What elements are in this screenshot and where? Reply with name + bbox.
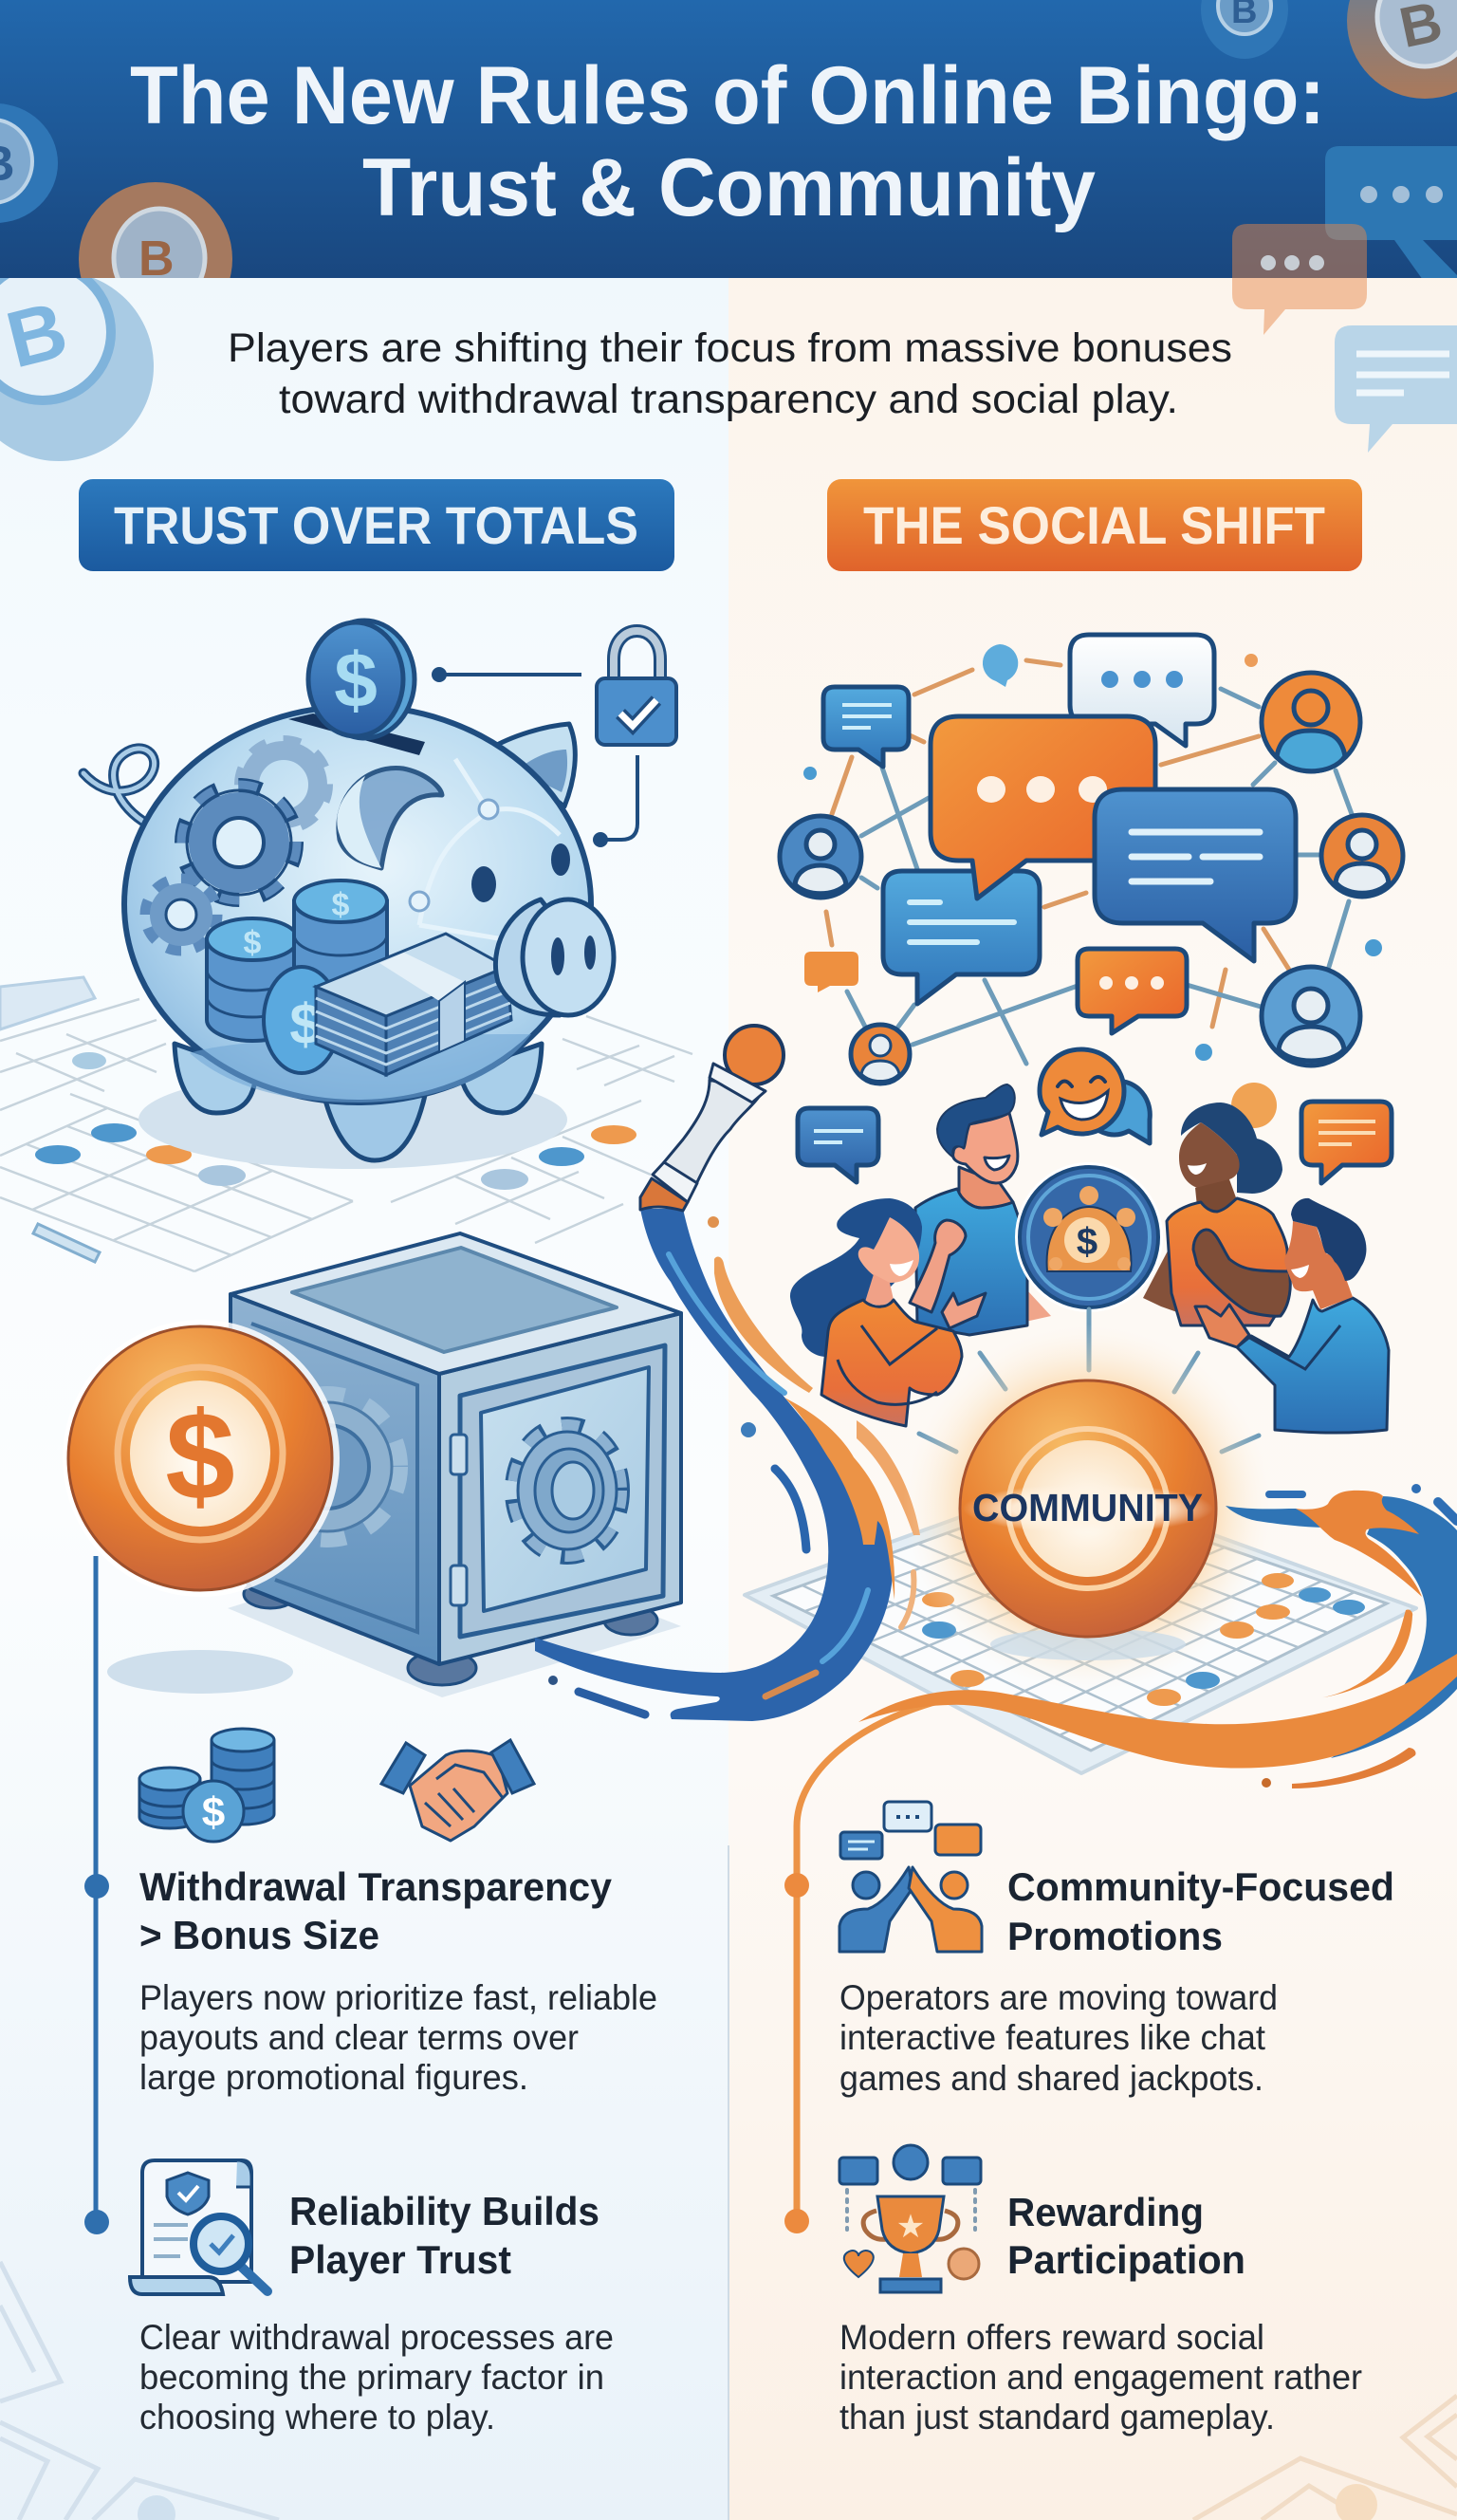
- piggy bank: [83, 621, 614, 1169]
- person: man in blue shirt: [915, 1084, 1051, 1335]
- coin stacks: [207, 880, 387, 1073]
- lock connector lines: [432, 667, 637, 847]
- banner: the social shift: [827, 479, 1362, 571]
- icon: trophy with social reactions: [839, 2145, 981, 2292]
- chat network connector lines: [803, 654, 1382, 1064]
- avatar: right: [1321, 815, 1403, 897]
- section: reliability builds player trust: [139, 2189, 614, 2437]
- decorative chat bubbles, upper right: [1232, 224, 1457, 453]
- cash bundle: [316, 934, 511, 1075]
- icon: document with shield and magnifier: [130, 2160, 267, 2294]
- eyes: [471, 866, 496, 902]
- coin shadow: [107, 1650, 293, 1694]
- person: woman with dark skin: [1143, 1102, 1290, 1325]
- jackpot medallion: $: [1077, 1221, 1097, 1263]
- tail: [83, 749, 155, 821]
- person: woman with orange top: [790, 1198, 986, 1426]
- orange dollar coin: [63, 1320, 340, 1597]
- icon: coin stacks: [139, 1729, 274, 1842]
- header band: B: [138, 232, 175, 287]
- chat bubble: small round: [983, 644, 1018, 687]
- orange and blue paint ribbons: [784, 1484, 1457, 2233]
- chat bubble: medium blue: [883, 871, 1040, 1004]
- ear: [339, 769, 442, 868]
- title: Trust & Community: [362, 142, 1096, 233]
- section: withdrawal transparency: Withdrawal Transparency: [139, 1864, 613, 1909]
- section: community-focused promotions: games and shared jackpots.: [839, 2059, 1263, 2098]
- chat bubble: people right: [1231, 1083, 1392, 1183]
- chat bubble: big blue: [1095, 789, 1296, 961]
- section: reliability builds player trust: Player Trust: [289, 2237, 511, 2282]
- paintbrush and blue paint stream: [535, 1026, 920, 1721]
- section: rewarding participation: interaction and engagement rather: [839, 2358, 1362, 2397]
- coin stacks: $: [289, 992, 322, 1056]
- chat bubble: small orange: [804, 952, 858, 992]
- chat bubble: people left: [798, 1108, 878, 1182]
- banner: trust over totals: TRUST OVER TOTALS: [114, 495, 638, 555]
- falling coin: [308, 621, 415, 738]
- section: withdrawal transparency: > Bonus Size: [139, 1913, 379, 1957]
- chat bubble: big orange: [931, 716, 1155, 899]
- right bingo card: [745, 1480, 1416, 1773]
- circuit line: [419, 759, 560, 949]
- coin stacks: $: [332, 887, 350, 923]
- section: rewarding participation: Rewarding: [1007, 2190, 1204, 2234]
- section: withdrawal transparency: payouts and clear terms over: [139, 2018, 579, 2057]
- coin slot: [288, 713, 425, 755]
- title: [130, 50, 1325, 233]
- section: community-focused promotions: [839, 1864, 1394, 2098]
- snout: [495, 899, 579, 1015]
- section: reliability builds player trust: Reliability Builds: [289, 2189, 599, 2233]
- gears: [249, 750, 318, 819]
- community ball: [903, 1324, 1273, 1694]
- laughing emoji bubble: [1040, 1049, 1150, 1143]
- padlock with check: [597, 631, 676, 745]
- section: withdrawal transparency: large promotional figures.: [139, 2058, 528, 2097]
- section: community-focused promotions: interactive features like chat: [839, 2018, 1266, 2057]
- section: community-focused promotions: Operators are moving toward: [839, 1978, 1278, 2017]
- section: rewarding participation: [839, 2190, 1362, 2437]
- avatar: left: [780, 816, 861, 898]
- safe: [228, 1233, 681, 1697]
- section: withdrawal transparency: Players now prioritize fast, reliable: [139, 1978, 657, 2017]
- coin stacks: $: [244, 925, 262, 961]
- icon: coin stacks: $: [202, 1789, 225, 1836]
- subtitle: Players are shifting their focus from massive bonuses: [228, 325, 1232, 371]
- section: rewarding participation: Modern offers reward social: [839, 2318, 1264, 2357]
- falling coin: $: [334, 638, 378, 724]
- section: reliability builds player trust: becoming the primary factor in: [139, 2358, 604, 2397]
- icon: trophy with social reactions: ★: [896, 2209, 925, 2245]
- banner: the social shift: THE SOCIAL SHIFT: [863, 495, 1325, 555]
- community rays: [919, 1309, 1259, 1452]
- subtitle: [228, 325, 1232, 422]
- left bingo card floor: [0, 977, 692, 1271]
- section: community-focused promotions: Promotions: [1007, 1914, 1223, 1958]
- chat bubble: small blue upper left: [823, 687, 909, 767]
- section: community-focused promotions: Community-Focused: [1007, 1864, 1394, 1909]
- icon: high five with chat bubbles: [839, 1802, 982, 1952]
- decorative bingo ball, lower left: [0, 264, 154, 461]
- timeline: trust: [84, 1556, 109, 2234]
- header band: [0, 0, 1457, 278]
- decorative bingo ball, lower left: B: [0, 285, 76, 385]
- person: man in blue sweater: [1195, 1198, 1389, 1433]
- avatar: top right: [1262, 673, 1360, 771]
- subtitle: toward withdrawal transparency and social play.: [279, 377, 1178, 422]
- section: rewarding participation: Participation: [1007, 2237, 1245, 2282]
- section: reliability builds player trust: choosing where to play.: [139, 2398, 495, 2437]
- chat bubble: top white: [1070, 635, 1214, 746]
- banner: trust over totals: [79, 479, 674, 571]
- chat bubble: mid orange: [1078, 949, 1187, 1033]
- icon: handshake: [381, 1740, 534, 1841]
- avatar: small lower left: [851, 1025, 910, 1084]
- avatar: lower right: [1262, 967, 1360, 1065]
- section: withdrawal transparency: [139, 1864, 657, 2097]
- section: reliability builds player trust: Clear withdrawal processes are: [139, 2318, 614, 2357]
- orange dollar coin: $: [165, 1386, 235, 1526]
- title: The New Rules of Online Bingo:: [130, 50, 1325, 141]
- community ball: COMMUNITY: [972, 1486, 1203, 1529]
- section: rewarding participation: than just standard gameplay.: [839, 2398, 1275, 2437]
- jackpot medallion: [1015, 1162, 1163, 1312]
